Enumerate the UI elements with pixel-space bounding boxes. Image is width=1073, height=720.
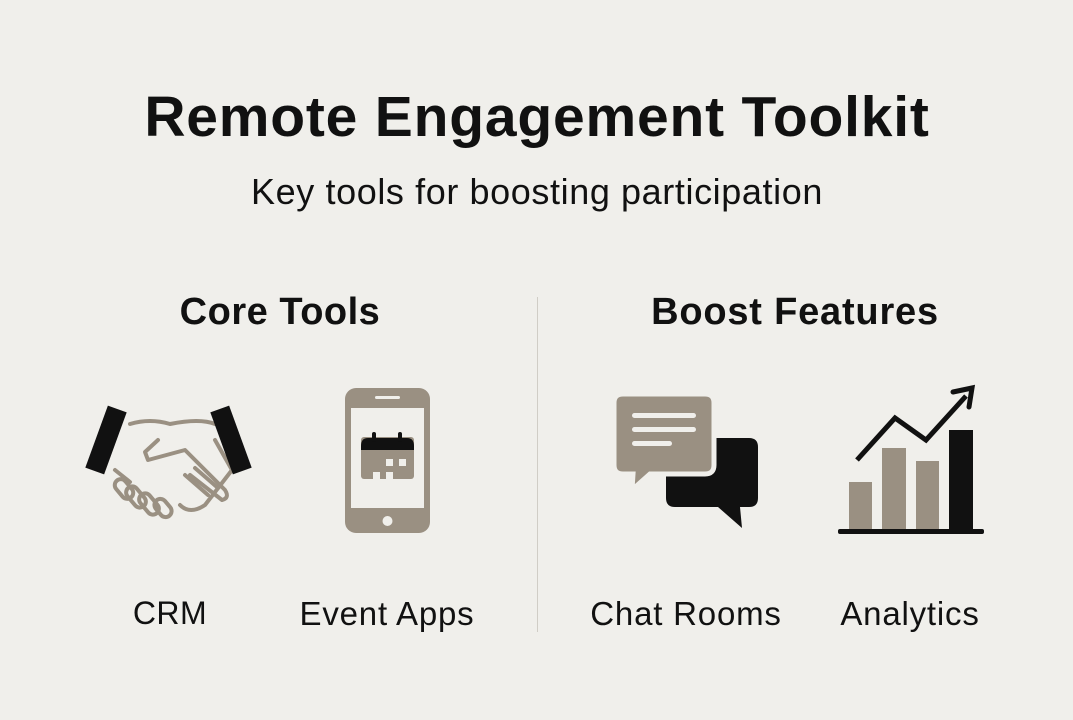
label: Analytics: Analytics bbox=[840, 595, 980, 632]
icon: chat bubbles bbox=[614, 394, 758, 528]
label: CRM: CRM bbox=[133, 595, 207, 631]
label: Event Apps: Event Apps bbox=[300, 595, 474, 632]
label: Chat Rooms: Chat Rooms bbox=[590, 595, 782, 632]
heading: Core Tools: Core Tools bbox=[180, 291, 380, 333]
icon: handshake bbox=[85, 406, 252, 520]
subtitle: Key tools for boosting participation bbox=[251, 171, 823, 212]
title: Remote Engagement Toolkit bbox=[144, 85, 930, 149]
heading: Boost Features: Boost Features bbox=[651, 291, 939, 333]
icon: phone with calendar bbox=[345, 388, 430, 533]
icon: analytics chart bbox=[838, 388, 984, 534]
